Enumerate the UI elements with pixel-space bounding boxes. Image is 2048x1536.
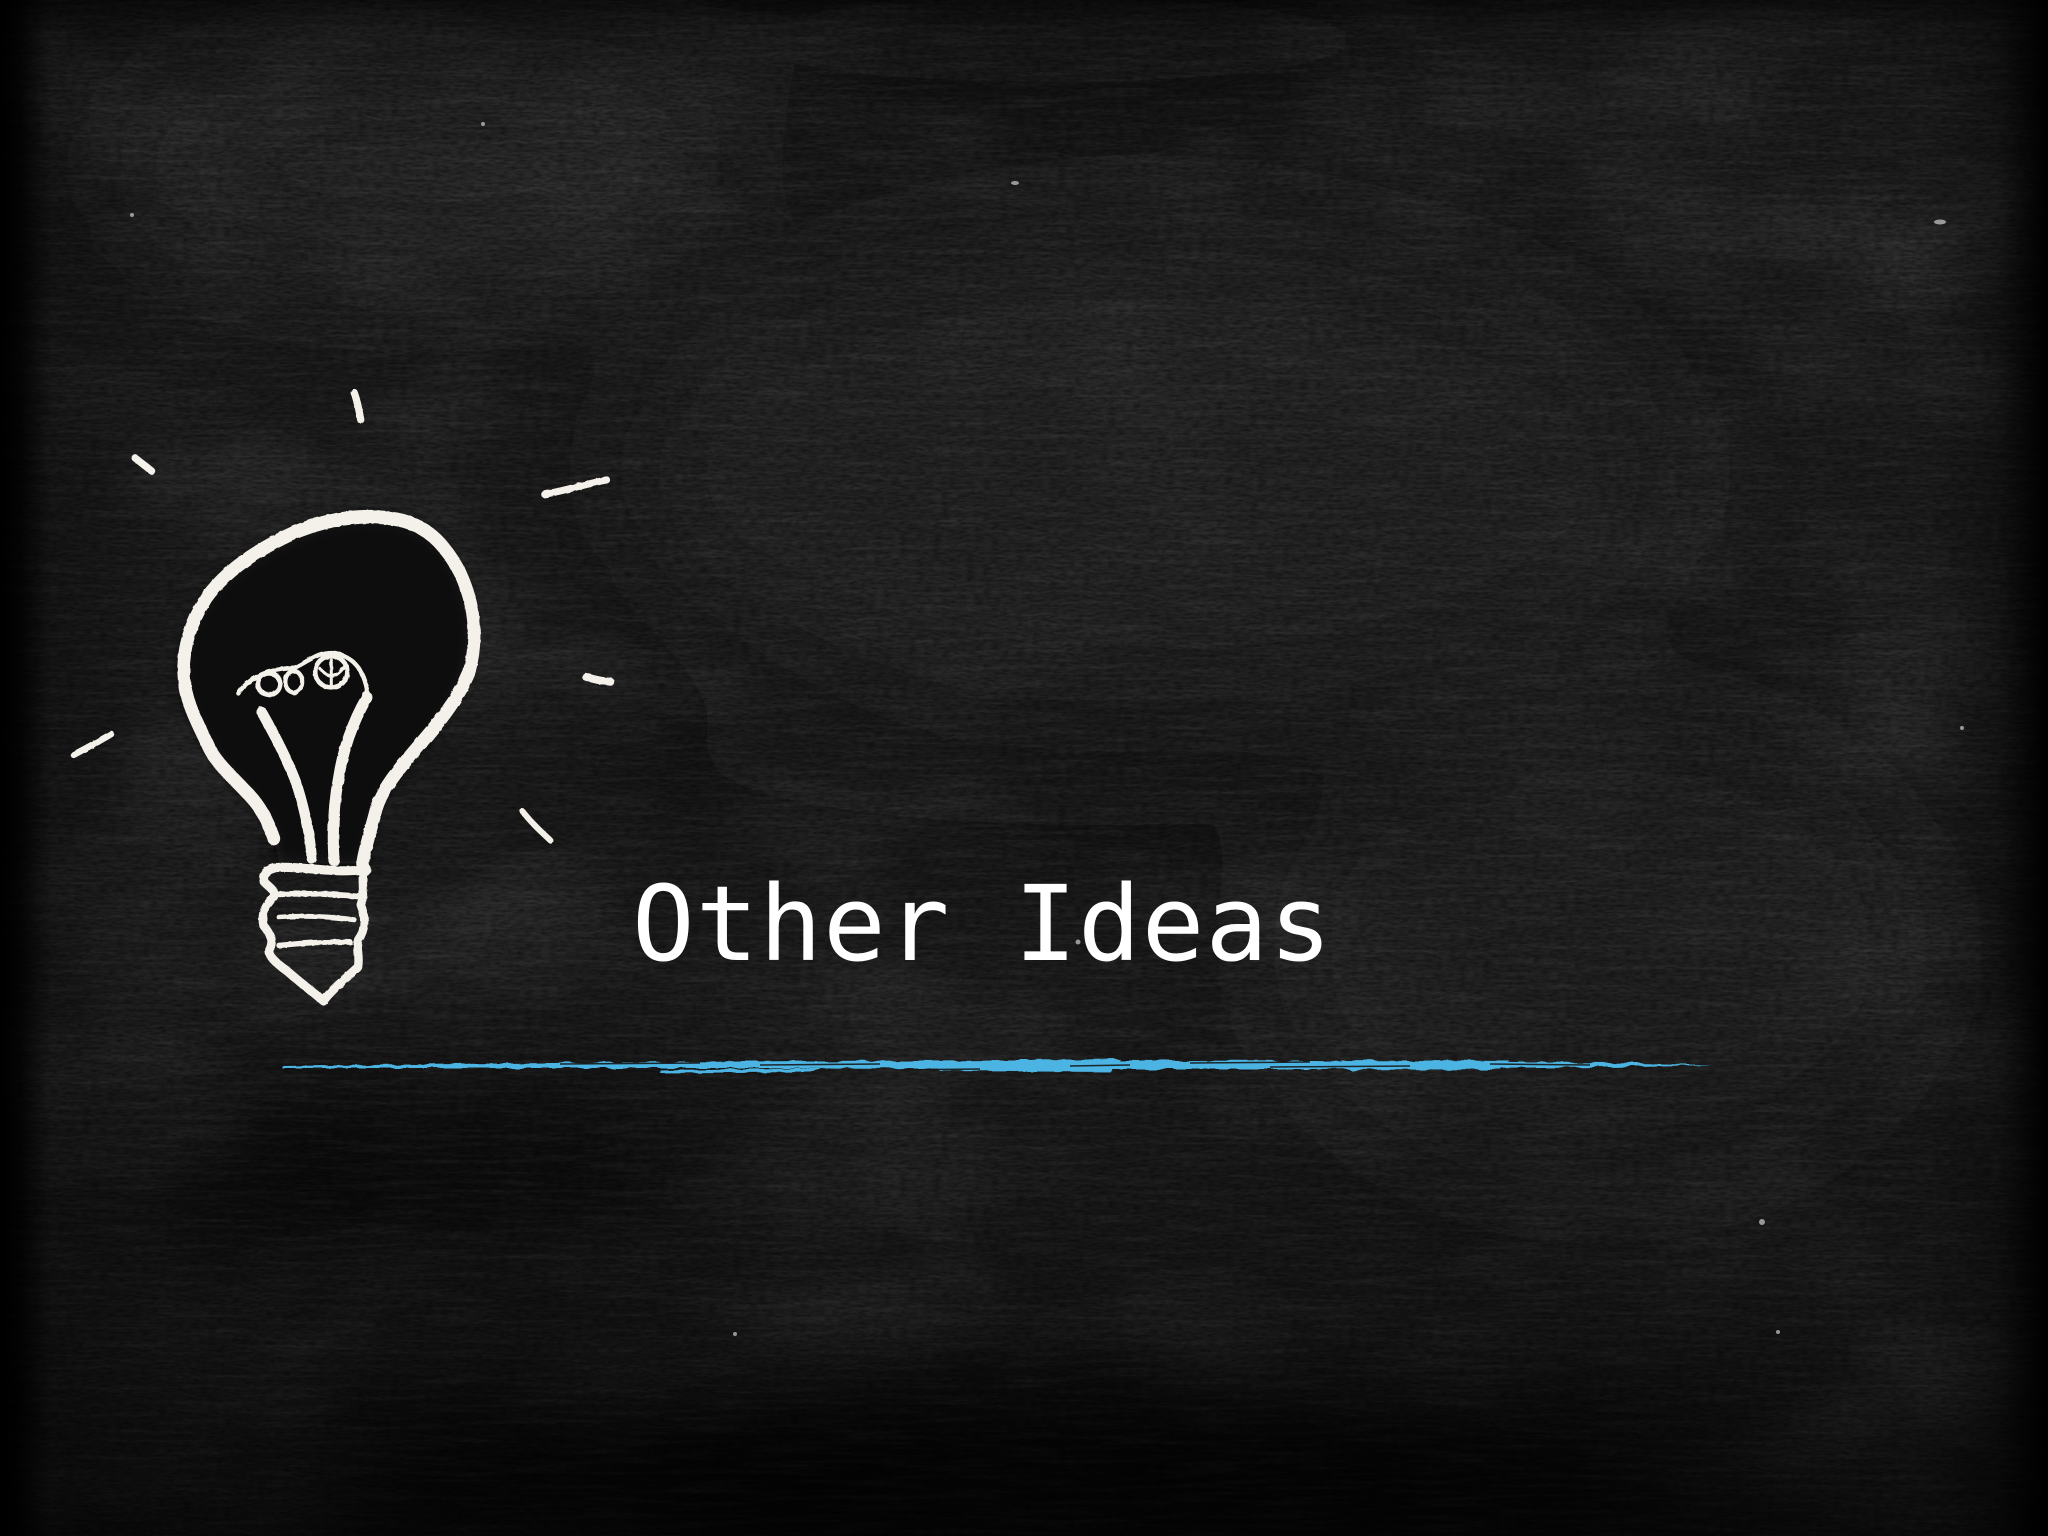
filament coils: [238, 653, 368, 693]
bulb interior: [183, 517, 472, 863]
screw base: [263, 867, 364, 1001]
bulb glass outline: [184, 517, 474, 870]
blue chalk underline: [282, 1059, 1715, 1073]
light rays: [354, 393, 361, 420]
title: Other Ideas: [632, 863, 1333, 985]
filament supports: [262, 712, 312, 858]
lightbulb icon: [74, 393, 611, 1001]
chalk streak gaps in underline: [560, 1062, 1590, 1070]
